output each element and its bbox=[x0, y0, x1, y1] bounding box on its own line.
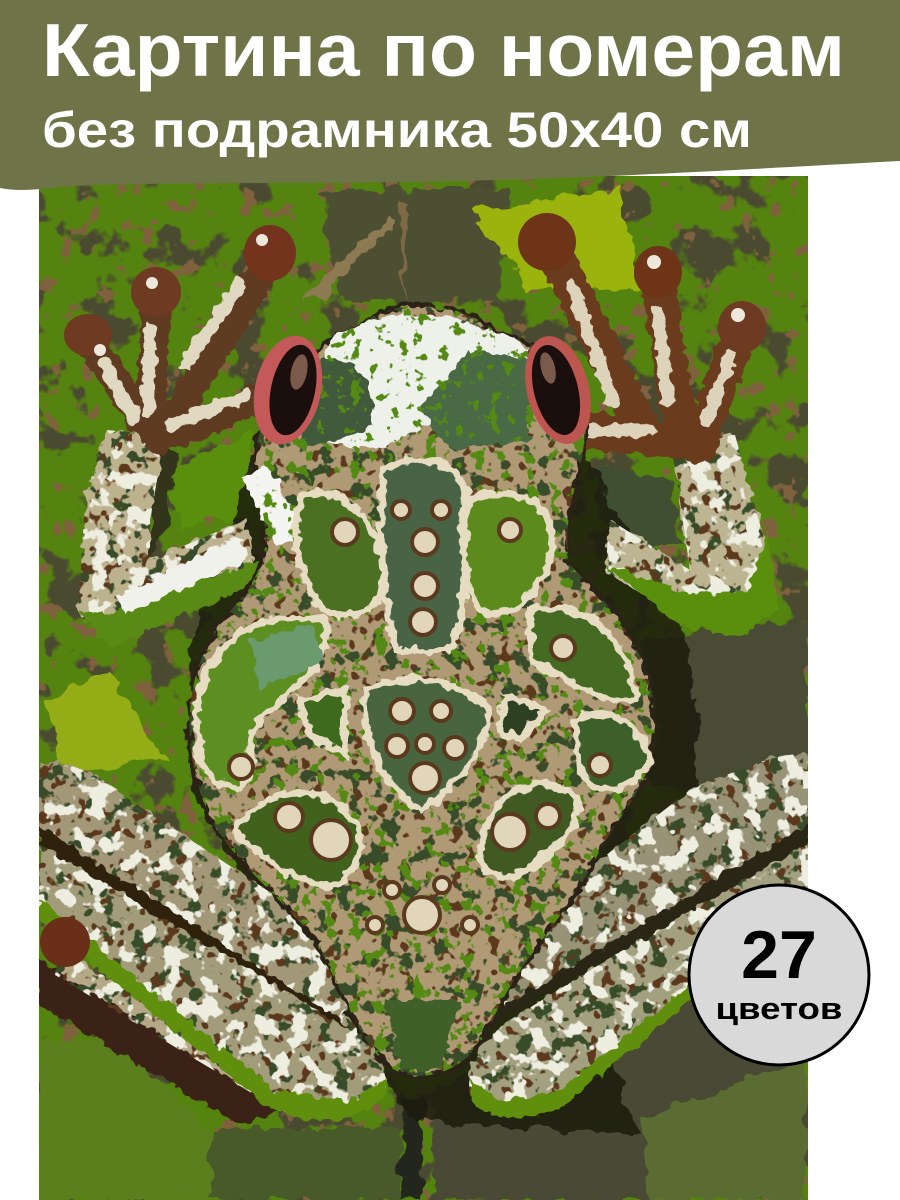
hind toe bbox=[40, 917, 90, 967]
body spots bbox=[229, 501, 611, 933]
leaf background patches bbox=[39, 176, 808, 1200]
limb mottling bbox=[39, 420, 808, 1140]
badge label: цветов bbox=[716, 991, 842, 1026]
right fingers bbox=[550, 245, 742, 445]
head markings bbox=[255, 315, 530, 540]
frog shadow bbox=[190, 460, 700, 1135]
colour count badge bbox=[689, 885, 869, 1065]
head speckles bbox=[300, 310, 540, 450]
right eye bbox=[525, 336, 591, 444]
badge number: 27 bbox=[741, 917, 817, 993]
frog bbox=[39, 213, 808, 1140]
left eye bbox=[254, 336, 322, 444]
left fingers bbox=[88, 258, 270, 440]
subtitle: без подрамника 50х40 см bbox=[42, 102, 752, 158]
painting background bbox=[39, 176, 808, 1200]
body bbox=[190, 305, 655, 1076]
limb bases bbox=[39, 430, 808, 1125]
badge circle bbox=[689, 885, 869, 1065]
back pattern patches bbox=[197, 460, 650, 886]
body mottling bbox=[180, 440, 660, 1080]
painting: frog on a leaf bbox=[39, 176, 808, 1200]
header banner bbox=[0, 0, 900, 190]
right finger pads bbox=[518, 213, 766, 353]
leg dividers and green rims bbox=[39, 530, 808, 1120]
lower body dark green bbox=[385, 1000, 460, 1070]
title: Картина по номерам bbox=[42, 8, 845, 92]
left finger pads bbox=[64, 225, 296, 356]
